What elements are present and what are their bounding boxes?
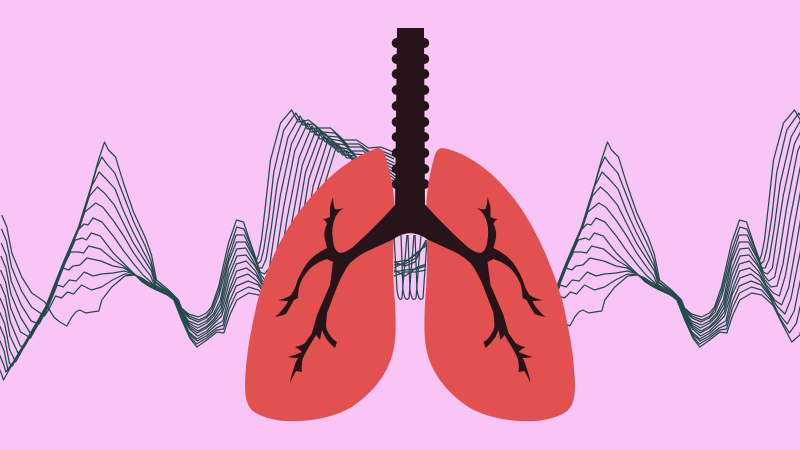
left lung xyxy=(245,148,396,421)
left bronchial tree xyxy=(275,197,411,383)
trachea ridges xyxy=(392,38,429,189)
right lung xyxy=(424,148,575,421)
waveform: left family of lines xyxy=(0,110,397,380)
waveform: lines seen between the lungs xyxy=(394,235,427,299)
right bronchial tree xyxy=(410,197,546,383)
trachea xyxy=(395,28,425,210)
waveform: right family of lines xyxy=(502,110,800,380)
